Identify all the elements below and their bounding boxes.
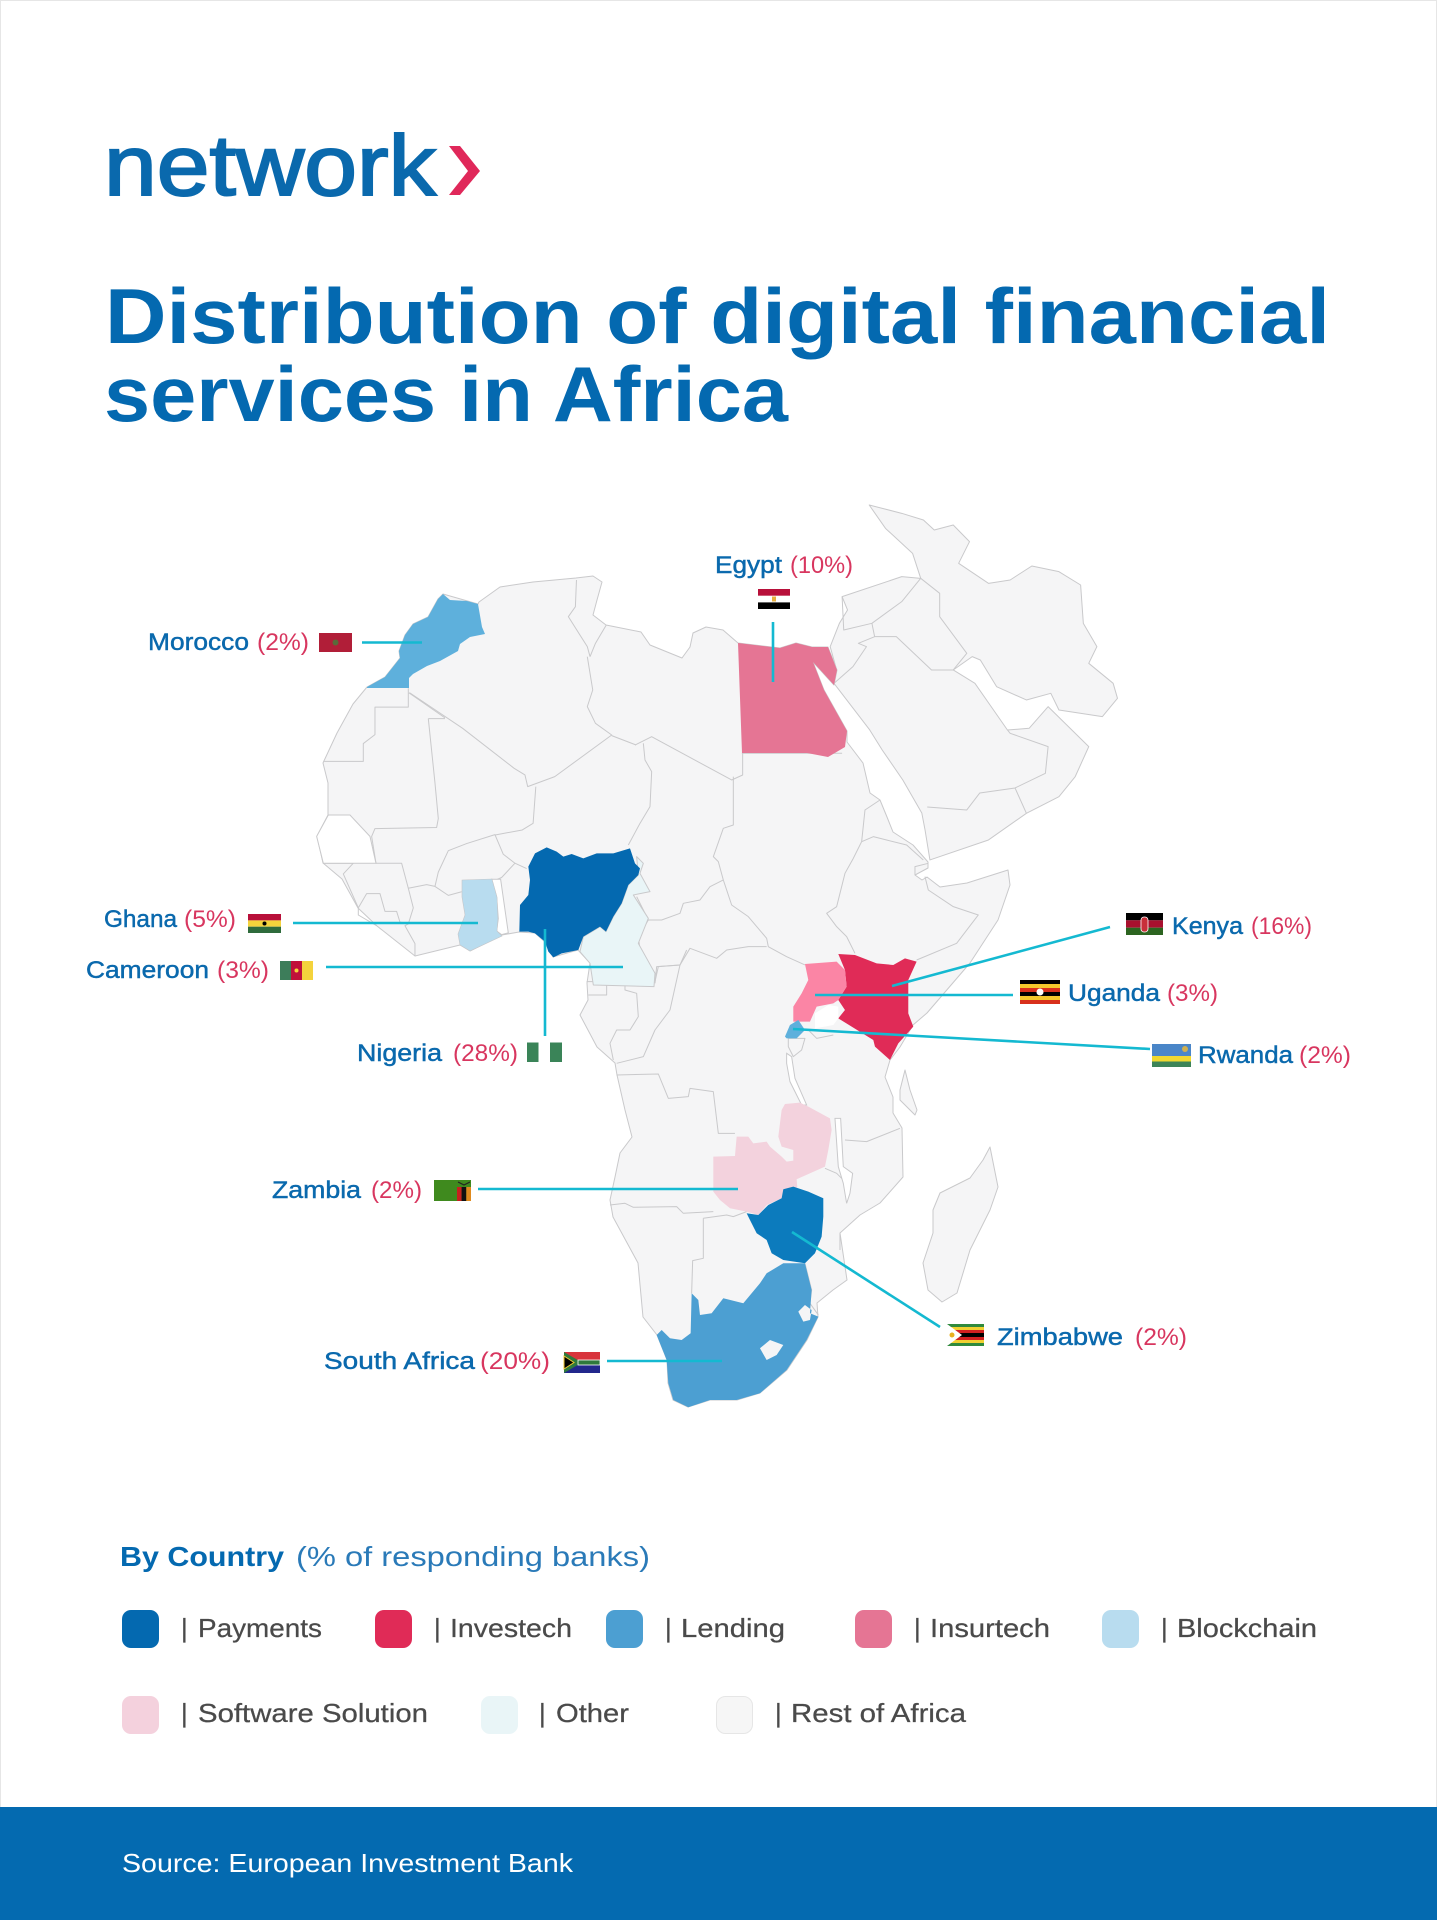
callout: Morocco: Morocco (148, 629, 249, 656)
callout: Morocco (148, 629, 422, 656)
callout: Ghana (104, 906, 478, 933)
legend item: Blockchain: Blockchain (1177, 1613, 1317, 1643)
flag: Morocco (319, 633, 352, 652)
flag: Kenya (1126, 913, 1163, 935)
logo: network: network (104, 119, 437, 214)
legend (122, 1610, 1317, 1734)
legend item: Other: | (539, 1698, 546, 1728)
callout: Cameroon: Cameroon (86, 957, 209, 984)
landmass: Arabia and Middle East (830, 505, 1117, 860)
flag: Uganda (1020, 980, 1060, 1004)
flag: Zambia (434, 1180, 471, 1201)
country: Cameroon (580, 857, 655, 987)
legend item: Software Solution: | (181, 1698, 188, 1728)
legend item: Payments: | (181, 1613, 188, 1643)
callout: Morocco: (2%) (257, 629, 309, 656)
callout: Zimbabwe: (2%) (1135, 1324, 1187, 1351)
legend item: Lending: Lending (681, 1613, 785, 1643)
callout: Egypt: (10%) (790, 552, 853, 579)
callout: Cameroon: (3%) (217, 957, 269, 984)
Lake Victoria (815, 1005, 838, 1028)
country: Rwanda (785, 1020, 805, 1038)
legend item: Software Solution (122, 1696, 428, 1734)
legend: heading: (% of responding banks) (296, 1541, 650, 1572)
callout: Egypt (715, 552, 853, 682)
country: Nigeria (519, 847, 640, 957)
callout: Rwanda: (2%) (1299, 1042, 1351, 1069)
flag: Zimbabwe (947, 1324, 984, 1346)
flag: Ghana (248, 914, 281, 933)
legend item: Lending (606, 1610, 785, 1648)
legend item: Insurtech (855, 1610, 1050, 1648)
landmass: Zanzibar island (900, 1070, 917, 1115)
callout: Rwanda: Rwanda (1198, 1042, 1294, 1069)
landmass: Madagascar (923, 1147, 998, 1302)
flag: Egypt (758, 589, 790, 609)
legend item: Lending: | (665, 1613, 672, 1643)
callout: Kenya: Kenya (1172, 913, 1244, 940)
callout: Nigeria: Nigeria (357, 1040, 443, 1067)
map of Africa and Arabia (317, 505, 1117, 1407)
legend item: Investech: Investech (450, 1613, 572, 1643)
callout: South Africa: (20%) (480, 1348, 550, 1375)
legend item: Blockchain: | (1161, 1613, 1168, 1643)
callout: Uganda: Uganda (1068, 980, 1161, 1007)
source note: Source: European Investment Bank (122, 1848, 574, 1878)
legend item: Insurtech: Insurtech (930, 1613, 1050, 1643)
legend item: Investech: | (434, 1613, 441, 1643)
Burundi (788, 1038, 805, 1057)
legend item: Blockchain (1102, 1610, 1317, 1648)
legend item: Software Solution: Software Solution (198, 1698, 428, 1728)
callout: Cameroon (86, 957, 623, 984)
country borders west Africa (317, 688, 527, 956)
legend item: Rest of Africa: | (775, 1698, 782, 1728)
callout: Kenya (892, 913, 1312, 986)
legend item: Rest of Africa: Rest of Africa (791, 1698, 967, 1728)
callout: Ghana: Ghana (104, 906, 178, 933)
callout: South Africa (324, 1348, 722, 1375)
countries: Cameroon and Nigeria (519, 847, 655, 987)
country borders central and southern Africa (587, 950, 917, 1407)
legend item: Rest of Africa (716, 1696, 967, 1734)
landmass: Africa (317, 576, 1010, 1407)
legend: heading (120, 1541, 650, 1572)
callout: Rwanda (793, 1029, 1351, 1069)
country: Zambia (713, 1103, 832, 1215)
title (104, 272, 1330, 438)
callout: South Africa: South Africa (324, 1348, 476, 1375)
callout: Zimbabwe: Zimbabwe (997, 1324, 1123, 1351)
callout: Ghana: (5%) (184, 906, 236, 933)
callout: Uganda (815, 980, 1218, 1007)
flag: Cameroon (280, 961, 313, 980)
callout: Kenya: (16%) (1251, 913, 1312, 940)
country: Uganda (793, 962, 847, 1022)
country: South Africa (657, 1263, 818, 1407)
Lake Tanganyika (787, 1053, 807, 1105)
callout: Zambia (272, 1177, 738, 1204)
country: Zimbabwe (747, 1187, 823, 1263)
Senegal in white (317, 815, 376, 863)
flag: Nigeria (527, 1042, 562, 1062)
title: services in Africa (104, 350, 789, 438)
flag: South Africa (564, 1352, 600, 1373)
callout: Nigeria: (28%) (453, 1040, 518, 1067)
legend item: Payments: Payments (198, 1613, 322, 1643)
country borders north Africa (410, 580, 842, 835)
Togo in white (492, 879, 508, 935)
footer band (0, 1807, 1437, 1920)
country: Kenya (838, 954, 917, 1060)
callout: Zambia: (2%) (371, 1177, 422, 1204)
country: Morocco (367, 594, 485, 688)
country: Egypt (738, 643, 847, 757)
legend item: Payments (122, 1610, 322, 1648)
Lake Malawi (835, 1118, 853, 1203)
legend: heading: By Country (120, 1541, 284, 1572)
legend item: Other (481, 1696, 629, 1734)
callout: Zambia: Zambia (272, 1177, 362, 1204)
legend item: Insurtech: | (914, 1613, 921, 1643)
title: Distribution of digital financial (105, 272, 1330, 360)
legend item: Other: Other (556, 1698, 629, 1728)
callout: Egypt: Egypt (715, 552, 782, 579)
flag: Rwanda (1152, 1044, 1191, 1067)
legend item: Investech (375, 1610, 572, 1648)
callout: Uganda: (3%) (1167, 980, 1218, 1007)
callout: Nigeria (357, 929, 562, 1067)
callout: Zimbabwe (792, 1232, 1187, 1351)
country: Ghana (458, 879, 502, 951)
country borders central and east Africa (628, 737, 978, 983)
